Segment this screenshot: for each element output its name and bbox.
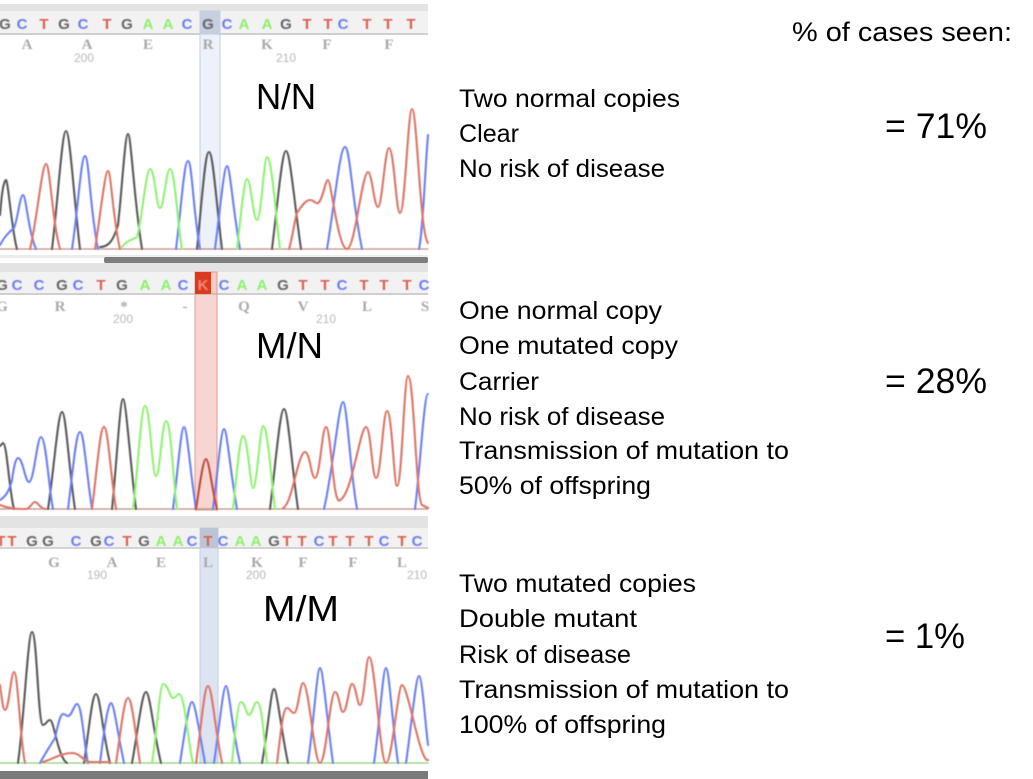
sequence letters: T xyxy=(297,533,307,550)
amino acid labels: L xyxy=(397,555,407,571)
text block: M/N description xyxy=(459,297,789,500)
sequence letters: A xyxy=(257,277,268,294)
text block: M/N description: One normal copy xyxy=(459,297,663,325)
sequence letters: A xyxy=(262,16,273,33)
sequence letters: T xyxy=(397,533,407,550)
sequence letters: C xyxy=(78,16,89,33)
column heading: % of cases seen: xyxy=(792,17,1012,47)
amino acid labels: L xyxy=(362,299,372,315)
amino acid labels: E xyxy=(156,555,166,571)
percentage: N/N: = 71% xyxy=(885,107,987,146)
sequence letters: C xyxy=(219,277,230,294)
trace peaks xyxy=(0,376,428,509)
position numbers: 200 xyxy=(246,568,266,582)
trace peaks xyxy=(0,632,428,763)
panel: N/N chromatogram xyxy=(0,4,428,249)
sequence letters: C xyxy=(187,533,198,550)
sequence letters: C xyxy=(314,533,325,550)
sequence letters: C xyxy=(218,533,229,550)
label: M/N: M/N xyxy=(256,325,323,366)
sequence letters: T xyxy=(7,533,17,550)
sequence letters: C xyxy=(104,533,115,550)
sequence letters: C xyxy=(419,277,430,294)
sequence letters: G xyxy=(116,277,128,294)
sequence letters: C xyxy=(337,277,348,294)
text block: M/N description: 50% of offspring xyxy=(459,472,651,500)
amino acid labels: A xyxy=(107,555,118,571)
panel: M/N chromatogram xyxy=(0,272,430,520)
sequence letters: A xyxy=(239,16,250,33)
amino acid labels: A xyxy=(82,37,93,53)
sequence letters: G xyxy=(42,533,54,550)
amino acid labels: F xyxy=(298,555,308,571)
sequence letters: A xyxy=(237,277,248,294)
sequence letters: A xyxy=(140,277,151,294)
amino acid labels: S xyxy=(421,299,429,315)
amino acid labels: - xyxy=(182,299,188,315)
sequence letters xyxy=(0,277,430,294)
percentage: M/M: = 1% xyxy=(885,617,965,656)
amino acid labels: K xyxy=(261,37,273,53)
sequence letters: T xyxy=(328,533,338,550)
sequence letters: G xyxy=(277,277,289,294)
sequence letters: G xyxy=(268,533,280,550)
text block: M/M description: Risk of disease xyxy=(459,641,631,669)
amino acid labels: F xyxy=(348,555,358,571)
sequence letters: C xyxy=(222,16,233,33)
sequence letters: T xyxy=(406,16,416,33)
sequence letters: G xyxy=(202,16,214,33)
sequence letters: A xyxy=(156,533,167,550)
sequence letters: G xyxy=(90,533,102,550)
sequence letters: A xyxy=(143,16,154,33)
sequence letters: T xyxy=(345,533,355,550)
position numbers: 210 xyxy=(276,51,296,65)
text block: N/N description: No risk of disease xyxy=(459,155,665,183)
sequence letters: T xyxy=(379,277,389,294)
sequence letters: T xyxy=(102,16,112,33)
label: M/M: M/M xyxy=(263,588,339,629)
sequence letters: T xyxy=(359,277,369,294)
position numbers xyxy=(87,568,427,582)
sequence letters: C xyxy=(178,277,189,294)
amino acid labels: K xyxy=(251,555,263,571)
highlighted mutation band xyxy=(195,272,217,510)
position numbers: 210 xyxy=(407,568,427,582)
scrollbar: M/M panel xyxy=(0,771,428,779)
sequence letters: T xyxy=(203,533,213,550)
position numbers: 190 xyxy=(87,568,107,582)
sequence letters: G xyxy=(138,533,150,550)
amino acid labels: * xyxy=(120,299,128,315)
trace peaks xyxy=(0,109,428,249)
sequence letters: C xyxy=(17,16,28,33)
sequence letters: T xyxy=(383,16,393,33)
sequence letters xyxy=(0,533,423,550)
sequence letters: A xyxy=(173,533,184,550)
text block: M/M description xyxy=(459,570,789,739)
sequence letters: G xyxy=(56,277,68,294)
sequence letters: T xyxy=(362,16,372,33)
sequence letters: T xyxy=(298,277,308,294)
sequence letters: A xyxy=(163,16,174,33)
sequence letters: A xyxy=(251,533,262,550)
highlighted position band xyxy=(200,528,218,763)
sequence letters xyxy=(0,16,416,33)
amino acid labels: Q xyxy=(238,299,250,315)
sequence letters: C xyxy=(73,277,84,294)
sequence letters: T xyxy=(282,533,292,550)
sequence letters: C xyxy=(338,16,349,33)
sequence letters: C xyxy=(182,16,193,33)
amino acid labels: F xyxy=(322,37,332,53)
text block: N/N description: Clear xyxy=(459,120,519,148)
text block: M/N description: Transmission of mutation to xyxy=(459,437,789,465)
text block: N/N description: Two normal copies xyxy=(459,85,680,113)
sequence letters: T xyxy=(96,277,106,294)
position numbers: 200 xyxy=(74,51,94,65)
sequence letters: G xyxy=(280,16,292,33)
sequence letters: A xyxy=(235,533,246,550)
sequence letters: G xyxy=(58,16,70,33)
text block: M/M description: Double mutant xyxy=(459,605,637,633)
amino acid labels: A xyxy=(22,37,33,53)
amino acid labels: G xyxy=(48,555,60,571)
text block: M/M description: 100% of offspring xyxy=(459,711,666,739)
position numbers: 210 xyxy=(316,312,336,326)
text block: M/N description: Carrier xyxy=(459,368,539,396)
amino acid labels xyxy=(22,37,394,53)
position numbers xyxy=(74,51,296,65)
text block: M/M description: Transmission of mutation to xyxy=(459,676,789,704)
amino acid labels: E xyxy=(143,37,153,53)
sequence letters: T xyxy=(39,16,49,33)
highlighted position band xyxy=(200,11,220,249)
text block: M/N description: One mutated copy xyxy=(459,332,679,360)
sequence letters: C xyxy=(412,533,423,550)
amino acid labels: F xyxy=(384,37,394,53)
sequence letters: T xyxy=(122,533,132,550)
amino acid labels xyxy=(0,299,429,315)
position numbers xyxy=(113,312,336,326)
sequence letters: T xyxy=(364,533,374,550)
amino acid labels: R xyxy=(203,37,214,53)
sequence letters: C xyxy=(12,277,23,294)
position numbers: 200 xyxy=(113,312,133,326)
sequence letters: C xyxy=(379,533,390,550)
text block: N/N description xyxy=(459,85,680,183)
amino acid labels: R xyxy=(55,299,66,315)
text block: M/N description: No risk of disease xyxy=(459,403,665,431)
sequence letters: K xyxy=(198,277,209,294)
sequence letters: A xyxy=(161,277,172,294)
sequence letters: G xyxy=(121,16,133,33)
amino acid labels: L xyxy=(203,555,213,571)
sequence letters: G xyxy=(26,533,38,550)
amino acid labels: V xyxy=(298,299,309,315)
sequence letters: T xyxy=(323,16,333,33)
percentage: M/N: = 28% xyxy=(885,362,987,401)
sequence letters: C xyxy=(71,533,82,550)
text block: M/M description: Two mutated copies xyxy=(459,570,696,598)
label: N/N: N/N xyxy=(256,76,316,117)
amino acid labels xyxy=(48,555,407,571)
scrollbar: N/N panel xyxy=(0,255,428,272)
sequence letters: C xyxy=(34,277,45,294)
sequence letters: T xyxy=(320,277,330,294)
sequence letters: T xyxy=(402,277,412,294)
panel: M/M chromatogram xyxy=(0,520,428,779)
sequence letters: T xyxy=(302,16,312,33)
